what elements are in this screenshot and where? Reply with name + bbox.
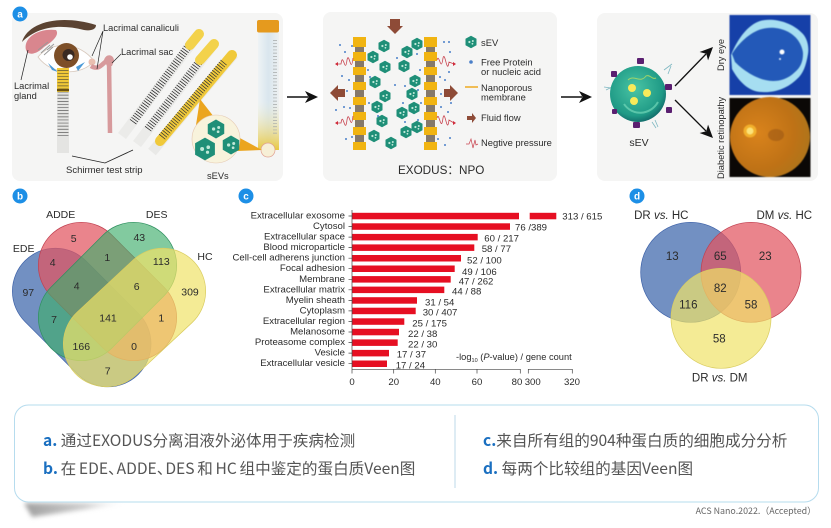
label: sEVs: sEVs [207, 171, 229, 181]
arrow: to dry eye [675, 43, 717, 86]
label: Schirmer test strip: Schirmer test strip [66, 165, 143, 176]
badge b: b [17, 192, 23, 202]
image: dry eye [730, 15, 810, 95]
arrow: fluid flow left [330, 85, 345, 101]
arrow: panel a to panel b [287, 91, 318, 103]
icon: free protein dots [335, 41, 452, 146]
value labels: 25 / 175 [412, 319, 447, 330]
category labels: Extracellular vesicle [260, 358, 345, 369]
venn diagram: four groups [0, 205, 223, 405]
legend: EXODUS: membrane [481, 92, 526, 102]
value labels: 52 / 100 [467, 255, 502, 266]
source citation: ACS Nano.2022.（Accepted） [696, 504, 816, 517]
axis tick labels: 80 [512, 377, 522, 388]
badge c [238, 188, 254, 204]
venn counts: 58 [713, 333, 726, 345]
arrow: to diabetic retinopathy [675, 100, 717, 142]
venn counts: 166 [73, 341, 90, 353]
category labels: Cytoplasm [300, 305, 345, 316]
axis title: P-value) / gene count [483, 352, 572, 362]
badge a: a [17, 10, 23, 20]
venn counts: 4 [50, 257, 56, 269]
venn counts: 5 [71, 233, 77, 245]
venn counts: 13 [666, 251, 679, 263]
axis title: -log [456, 352, 472, 362]
arrow: panel b to panel c [561, 91, 592, 103]
legend: EXODUS: Free Protein [481, 56, 533, 68]
arrow: fluid flow top [387, 19, 403, 34]
legend: EXODUS [465, 36, 552, 148]
bars [352, 213, 556, 367]
value labels: 76 /389 [515, 223, 547, 234]
value labels: 49 / 106 [462, 267, 497, 278]
venn counts: 0 [131, 341, 137, 353]
category labels: Proteasome complex [255, 337, 345, 348]
venn labels: DR vs. DM [692, 372, 748, 384]
icon: negative pressure waves [335, 56, 456, 125]
bar chart: cellular component analysis [232, 210, 602, 388]
value labels: 17 / 37 [397, 350, 426, 361]
label: Dry eye: Dry eye [716, 39, 726, 71]
venn labels: DM vs. HC [756, 210, 812, 222]
icon: eyebrow [22, 20, 96, 42]
venn counts: 7 [105, 366, 111, 378]
venn labels [634, 210, 812, 384]
category labels: Focal adhesion [280, 263, 345, 274]
venn labels: DES [146, 209, 167, 221]
value labels: 47 / 262 [459, 276, 493, 287]
venn counts: 65 [714, 251, 727, 263]
venn counts: 1 [104, 252, 110, 264]
value labels: 22 / 30 [408, 340, 437, 351]
value labels: 44 / 88 [452, 286, 481, 297]
category labels: Extracellular space [264, 232, 345, 243]
icon: lacrimal gland [26, 30, 57, 54]
icon: right membrane [424, 37, 437, 150]
value labels [396, 211, 602, 371]
category labels: Extracellular exosome [251, 210, 345, 222]
venn counts: 58 [745, 299, 757, 311]
icon: left membrane [353, 37, 366, 150]
venn counts: 116 [679, 299, 697, 311]
axis tick labels: 320 [564, 377, 580, 388]
category labels: Extracellular matrix [263, 284, 345, 295]
legend: EXODUS: Nanoporous [481, 82, 532, 93]
category labels: Melanosome [290, 326, 345, 338]
value labels: 58 / 77 [482, 244, 511, 255]
venn counts: 309 [181, 286, 199, 298]
caption b: b. 在 EDE、ADDE、DES 和 HC 组中鉴定的蛋白质Veen图 [43, 457, 415, 479]
caption a: a. 通过EXODUS分离泪液外泌体用于疾病检测 [43, 429, 355, 451]
venn counts: 7 [51, 314, 57, 326]
caption c: c.来自所有组的904种蛋白质的细胞成分分析 [483, 429, 787, 451]
panel a: tear collection [12, 13, 283, 181]
label: Lacrimal sac: Lacrimal sac [121, 47, 174, 57]
icon: eye [38, 42, 96, 72]
icon: three diagonal test strips [122, 34, 234, 152]
axis tick labels: 60 [472, 377, 482, 388]
venn counts: 1 [158, 312, 164, 324]
category labels: Myelin sheath [286, 295, 345, 306]
venn counts [666, 251, 772, 345]
label: sEV: sEV [629, 137, 649, 149]
value labels: 17 / 24 [396, 360, 426, 371]
category labels: Extracellular region [263, 316, 345, 327]
venn diagram: three comparisons [634, 210, 812, 384]
venn labels: HC [197, 251, 213, 263]
venn counts: 43 [133, 232, 145, 244]
badge a [12, 6, 28, 22]
venn counts: 4 [74, 280, 80, 292]
axis tick labels: 20 [388, 377, 399, 388]
value labels: 60 / 217 [484, 233, 519, 244]
venn labels [13, 209, 213, 263]
category labels: Membrane [299, 274, 345, 285]
category labels: Cell-cell adherens junction [232, 253, 345, 264]
venn counts: 97 [22, 287, 34, 299]
icon: vertical Schirmer strip [57, 68, 69, 153]
caption box [14, 405, 818, 502]
venn labels: DR vs. HC [634, 210, 688, 222]
axis tick labels [349, 377, 580, 388]
badge d: d [634, 192, 640, 202]
axis tick labels: 300 [525, 377, 541, 388]
legend: EXODUS: sEV [481, 37, 499, 48]
label: EXODUS NPO: EXODUS：NPO [398, 164, 484, 177]
icon: sEV sphere [604, 58, 672, 128]
axes [348, 210, 572, 374]
legend: EXODUS: Negtive pressure [481, 137, 552, 148]
badge b [12, 188, 28, 204]
venn counts: 82 [714, 283, 727, 295]
venn counts: 23 [759, 251, 772, 263]
icon: tear sample tube [257, 20, 279, 157]
venn labels: ADDE [46, 209, 75, 221]
icon: lacrimal sac [91, 60, 110, 133]
legend: EXODUS: or nucleic acid [481, 66, 541, 77]
image: diabetic retinopathy [730, 97, 810, 177]
axis title: ( [478, 352, 484, 362]
value labels: 31 / 54 [425, 297, 455, 308]
venn labels: EDE [13, 243, 34, 255]
axis title: 10 [472, 358, 478, 364]
legend: EXODUS: Fluid flow [481, 112, 521, 123]
value labels: 30 / 407 [423, 307, 457, 318]
label: Lacrimal gland: Lacrimal [14, 81, 49, 91]
axis tick labels: 40 [430, 377, 441, 388]
venn counts: 6 [134, 281, 140, 293]
panel: sEV disease applications [597, 13, 818, 181]
label: Diabetic retinopathy: Diabetic retinopathy [716, 96, 726, 179]
category labels: Vesicle [315, 348, 345, 359]
venn counts: 113 [153, 256, 170, 268]
category labels: Cytosol [313, 221, 345, 232]
label: Lacrimal gland: gland [14, 91, 37, 101]
panel: EXODUS NPO device [323, 12, 557, 181]
caption box shadow [24, 503, 128, 517]
venn counts: 141 [99, 312, 117, 324]
venn counts [22, 232, 199, 378]
icon: sEV magnified callout [192, 99, 262, 163]
category labels: Blood microparticle [263, 242, 345, 253]
icon: sEV particles [368, 38, 422, 149]
axis tick labels: 0 [349, 377, 355, 388]
caption d: d. 每两个比较组的基因Veen图 [483, 457, 693, 479]
badge d [630, 188, 644, 204]
badge c: c [243, 192, 249, 202]
label: Lacrimal canaliculi: Lacrimal canaliculi [103, 23, 179, 33]
category labels [232, 210, 345, 369]
value labels: 22 / 38 [408, 329, 437, 340]
arrow: fluid flow right [444, 85, 458, 101]
value labels: 313 / 615 [562, 211, 602, 222]
